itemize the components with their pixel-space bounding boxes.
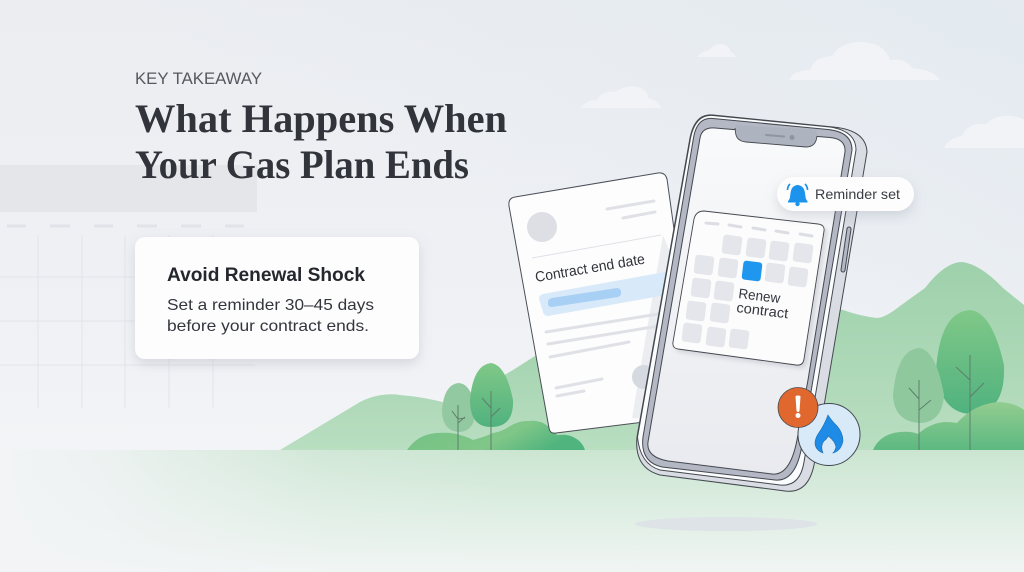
- icon: bell: [788, 184, 808, 206]
- phone bezel: [643, 118, 852, 480]
- callout body: before your contract ends.: [167, 318, 369, 335]
- ground: [0, 450, 1024, 572]
- phone: [637, 115, 867, 491]
- calendar label: Renew: [738, 285, 782, 306]
- reminder text: Reminder set: [815, 186, 900, 202]
- document label: Contract end date: [534, 252, 646, 286]
- notch: [735, 125, 817, 147]
- calendar grid: [681, 234, 814, 350]
- icon: gas flame: [798, 404, 860, 466]
- side button: [843, 229, 849, 270]
- phone shadow on document: [632, 235, 690, 420]
- title: What Happens When: [135, 96, 507, 141]
- background calendar motif: [0, 165, 257, 408]
- weekday header: [706, 223, 812, 236]
- selected date: [741, 260, 763, 282]
- phone rim: [638, 115, 856, 485]
- title: Your Gas Plan Ends: [135, 142, 469, 187]
- phone screen: [648, 128, 845, 474]
- clouds: [581, 42, 1024, 148]
- callout body: Set a reminder 30–45 days: [167, 297, 374, 314]
- title: [135, 96, 507, 187]
- calendar card: [673, 211, 824, 365]
- eyebrow: KEY TAKEAWAY: [135, 70, 262, 88]
- right trees: [873, 310, 1024, 450]
- callout card: [135, 237, 419, 359]
- left trees: [407, 363, 585, 450]
- calendar label: contract: [736, 299, 789, 321]
- ground shadow: [635, 517, 817, 531]
- callout heading: Avoid Renewal Shock: [167, 265, 365, 286]
- callout body: [167, 297, 374, 335]
- icon: alert: [778, 388, 818, 428]
- hills: [280, 262, 1024, 450]
- calendar label: [736, 285, 789, 321]
- avatar: [527, 212, 557, 242]
- phone body: [637, 115, 867, 491]
- contract document: [509, 173, 700, 433]
- highlighted date field: [539, 272, 672, 316]
- reminder pill: [777, 177, 914, 211]
